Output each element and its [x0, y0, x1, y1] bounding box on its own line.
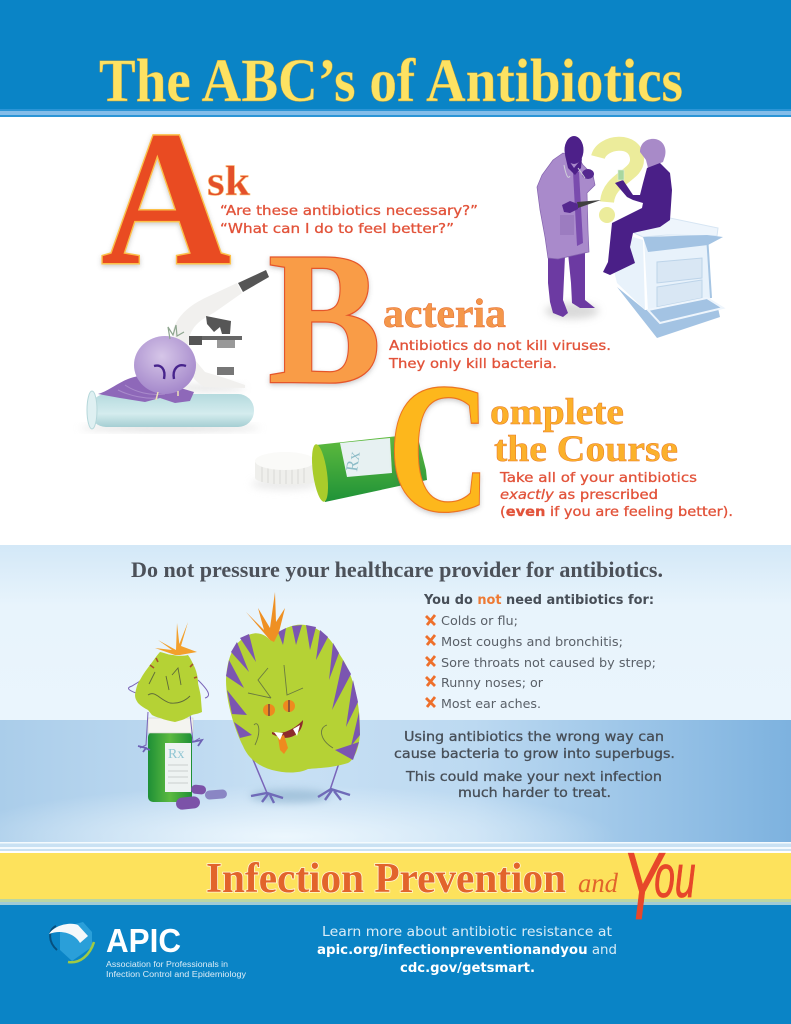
list heading: You do not need antibiotics for: [423, 593, 654, 608]
heading: acteria: acteria [383, 290, 506, 336]
icon: APIC shield [49, 922, 94, 962]
superbug warning text [394, 730, 675, 801]
complete the course text: (even if you are feeling better). [500, 504, 733, 520]
patient [603, 139, 672, 275]
illustration: small monster on pill bottle [129, 622, 227, 810]
list: conditions not needing antibiotics [423, 593, 656, 711]
subheading: Do not pressure your healthcare provider for antibiotics. [131, 557, 663, 582]
bottle cap [251, 452, 319, 490]
banner logotype [206, 832, 696, 939]
heading: omplete the Course [490, 392, 678, 470]
exam table [613, 218, 723, 338]
panel: light blue advice section background [0, 545, 791, 843]
big letter C: C [388, 346, 490, 551]
letter C: Complete the Course [388, 346, 733, 551]
You: ou [654, 843, 696, 910]
pills [175, 784, 227, 810]
complete the course text [499, 470, 733, 520]
ask questions text [220, 203, 478, 237]
small green monster [129, 622, 209, 752]
footer learn more text: apic.org/infectionpreventionandyou and [317, 943, 617, 958]
list item: runny noses: Runny noses; or [441, 675, 544, 690]
and: and [578, 868, 618, 898]
footer learn more text [317, 925, 617, 976]
heading: omplete the Course: the Course [494, 429, 678, 470]
list item: coughs: Most coughs and bronchitis; [441, 634, 623, 649]
list item: sore throats: Sore throats not caused by strep; [441, 655, 656, 670]
You: Y [622, 832, 666, 939]
list item: ear aches: Most ear aches. [441, 696, 541, 711]
complete the course text: Take all of your antibiotics [499, 470, 697, 486]
yellow banner [0, 853, 791, 899]
Infection Prevention: Infection Prevention [206, 856, 566, 902]
footer blue panel [0, 905, 791, 1024]
big letter A: A [101, 91, 231, 305]
illustration: pill bottle on its side with cap [251, 434, 427, 503]
footer learn more text: cdc.gov/getsmart. [400, 961, 535, 976]
ask questions text: “Are these antibiotics necessary?” [220, 203, 478, 219]
APIC full name: Association for Professionals in [106, 960, 228, 969]
APIC full name [106, 960, 246, 979]
illustration: doctor and patient at exam table [537, 136, 723, 338]
ask questions text: “What can I do to feel better?” [220, 221, 454, 237]
letter A: Ask [101, 91, 478, 305]
pill bottle upright: Rx [168, 747, 184, 762]
bottle: Rx [342, 450, 364, 473]
illustration: big green monster [226, 592, 360, 803]
heading: omplete the Course: omplete [490, 392, 624, 433]
APIC wordmark: APIC [106, 922, 181, 959]
APIC logo [49, 922, 246, 979]
icon: question mark [598, 144, 637, 223]
doctor [537, 136, 601, 319]
list item: colds or flu: Colds or flu; [441, 613, 518, 628]
bacteria text: They only kill bacteria. [388, 356, 557, 372]
complete the course text: exactly as prescribed [500, 487, 658, 503]
heading: sk: sk [207, 159, 251, 205]
panel: white ABC section background [0, 117, 791, 545]
illustration: purple germ on test tube [80, 325, 260, 430]
header band [0, 0, 791, 117]
letter B: Bacteria [268, 214, 611, 424]
footer learn more text: Learn more about antibiotic resistance at [322, 925, 612, 940]
banner lower stripes [0, 899, 791, 905]
title: The ABC’s of Antibiotics [99, 48, 683, 115]
superbug warning text: Using antibiotics the wrong way can [404, 730, 664, 745]
superbug warning text: cause bacteria to grow into superbugs. [394, 747, 675, 762]
test tube [87, 391, 254, 429]
footer stripes [0, 842, 791, 853]
purple germ [98, 325, 196, 403]
bacteria text: Antibiotics do not kill viruses. [389, 338, 611, 354]
bottle [309, 434, 427, 503]
superbug warning text: much harder to treat. [458, 786, 611, 801]
APIC full name: Infection Control and Epidemiology [106, 970, 246, 979]
big letter B: B [268, 214, 381, 424]
bacteria text [388, 338, 611, 372]
illustration: microscope [165, 270, 269, 391]
pill bottle upright [148, 718, 193, 802]
superbug warning text: This could make your next infection [405, 770, 662, 785]
